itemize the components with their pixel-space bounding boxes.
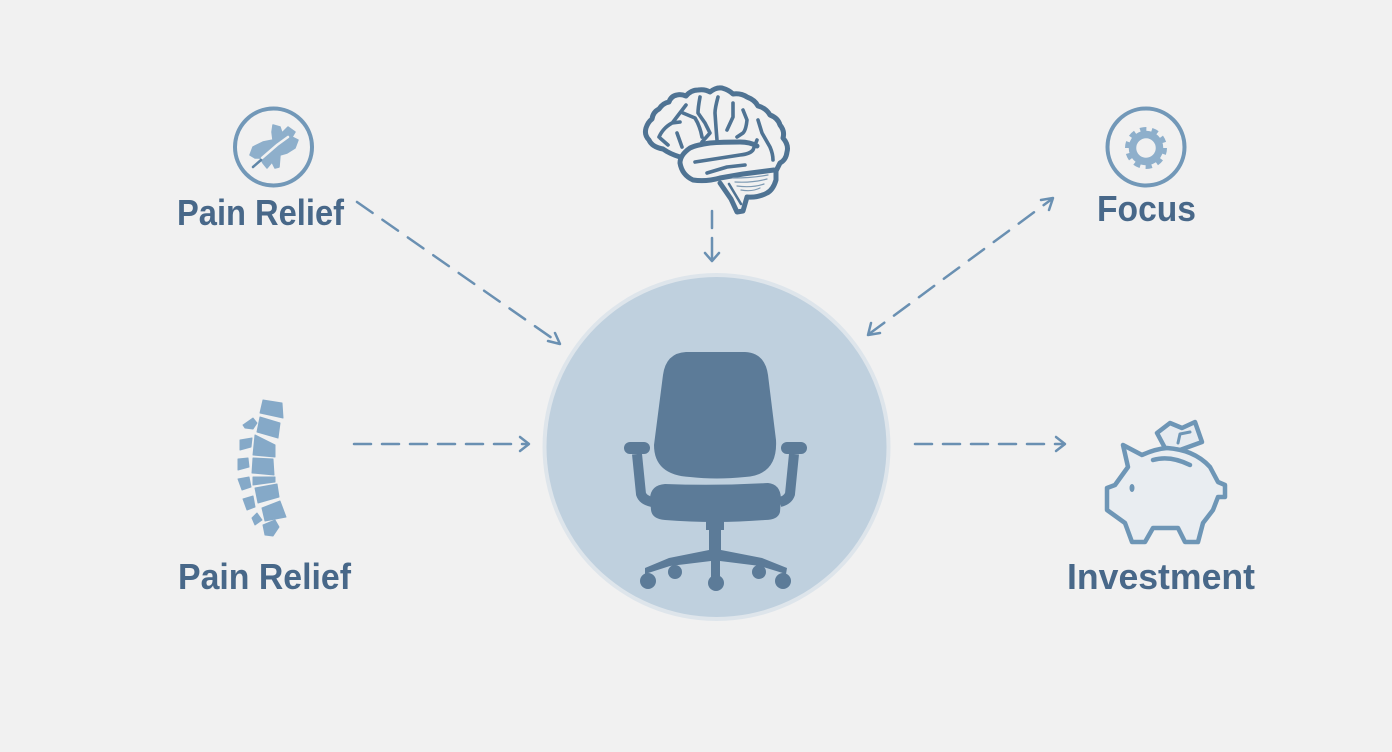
icon: piggy bank (1107, 422, 1225, 542)
icon: crossed-out hand in circle (top left) (235, 108, 312, 186)
arrow: chair to investment (915, 437, 1065, 451)
arrow: brain to chair (705, 211, 719, 261)
icon: spine (238, 400, 286, 536)
icon: office chair (624, 352, 807, 591)
arrow: focus and chair, double-headed (868, 198, 1053, 335)
arrow: spine to chair (354, 437, 529, 451)
icon: brain (645, 88, 788, 212)
central circle with chair (542, 273, 890, 621)
label: Pain Relief (top): Pain Relief (177, 192, 345, 233)
arrow: pain relief to chair (357, 202, 560, 344)
icon: gear in circle (focus) (1108, 108, 1184, 186)
label: Pain Relief (bottom): Pain Relief (178, 556, 352, 597)
label: Investment: Investment (1067, 556, 1255, 597)
label: Focus: Focus (1097, 188, 1196, 229)
